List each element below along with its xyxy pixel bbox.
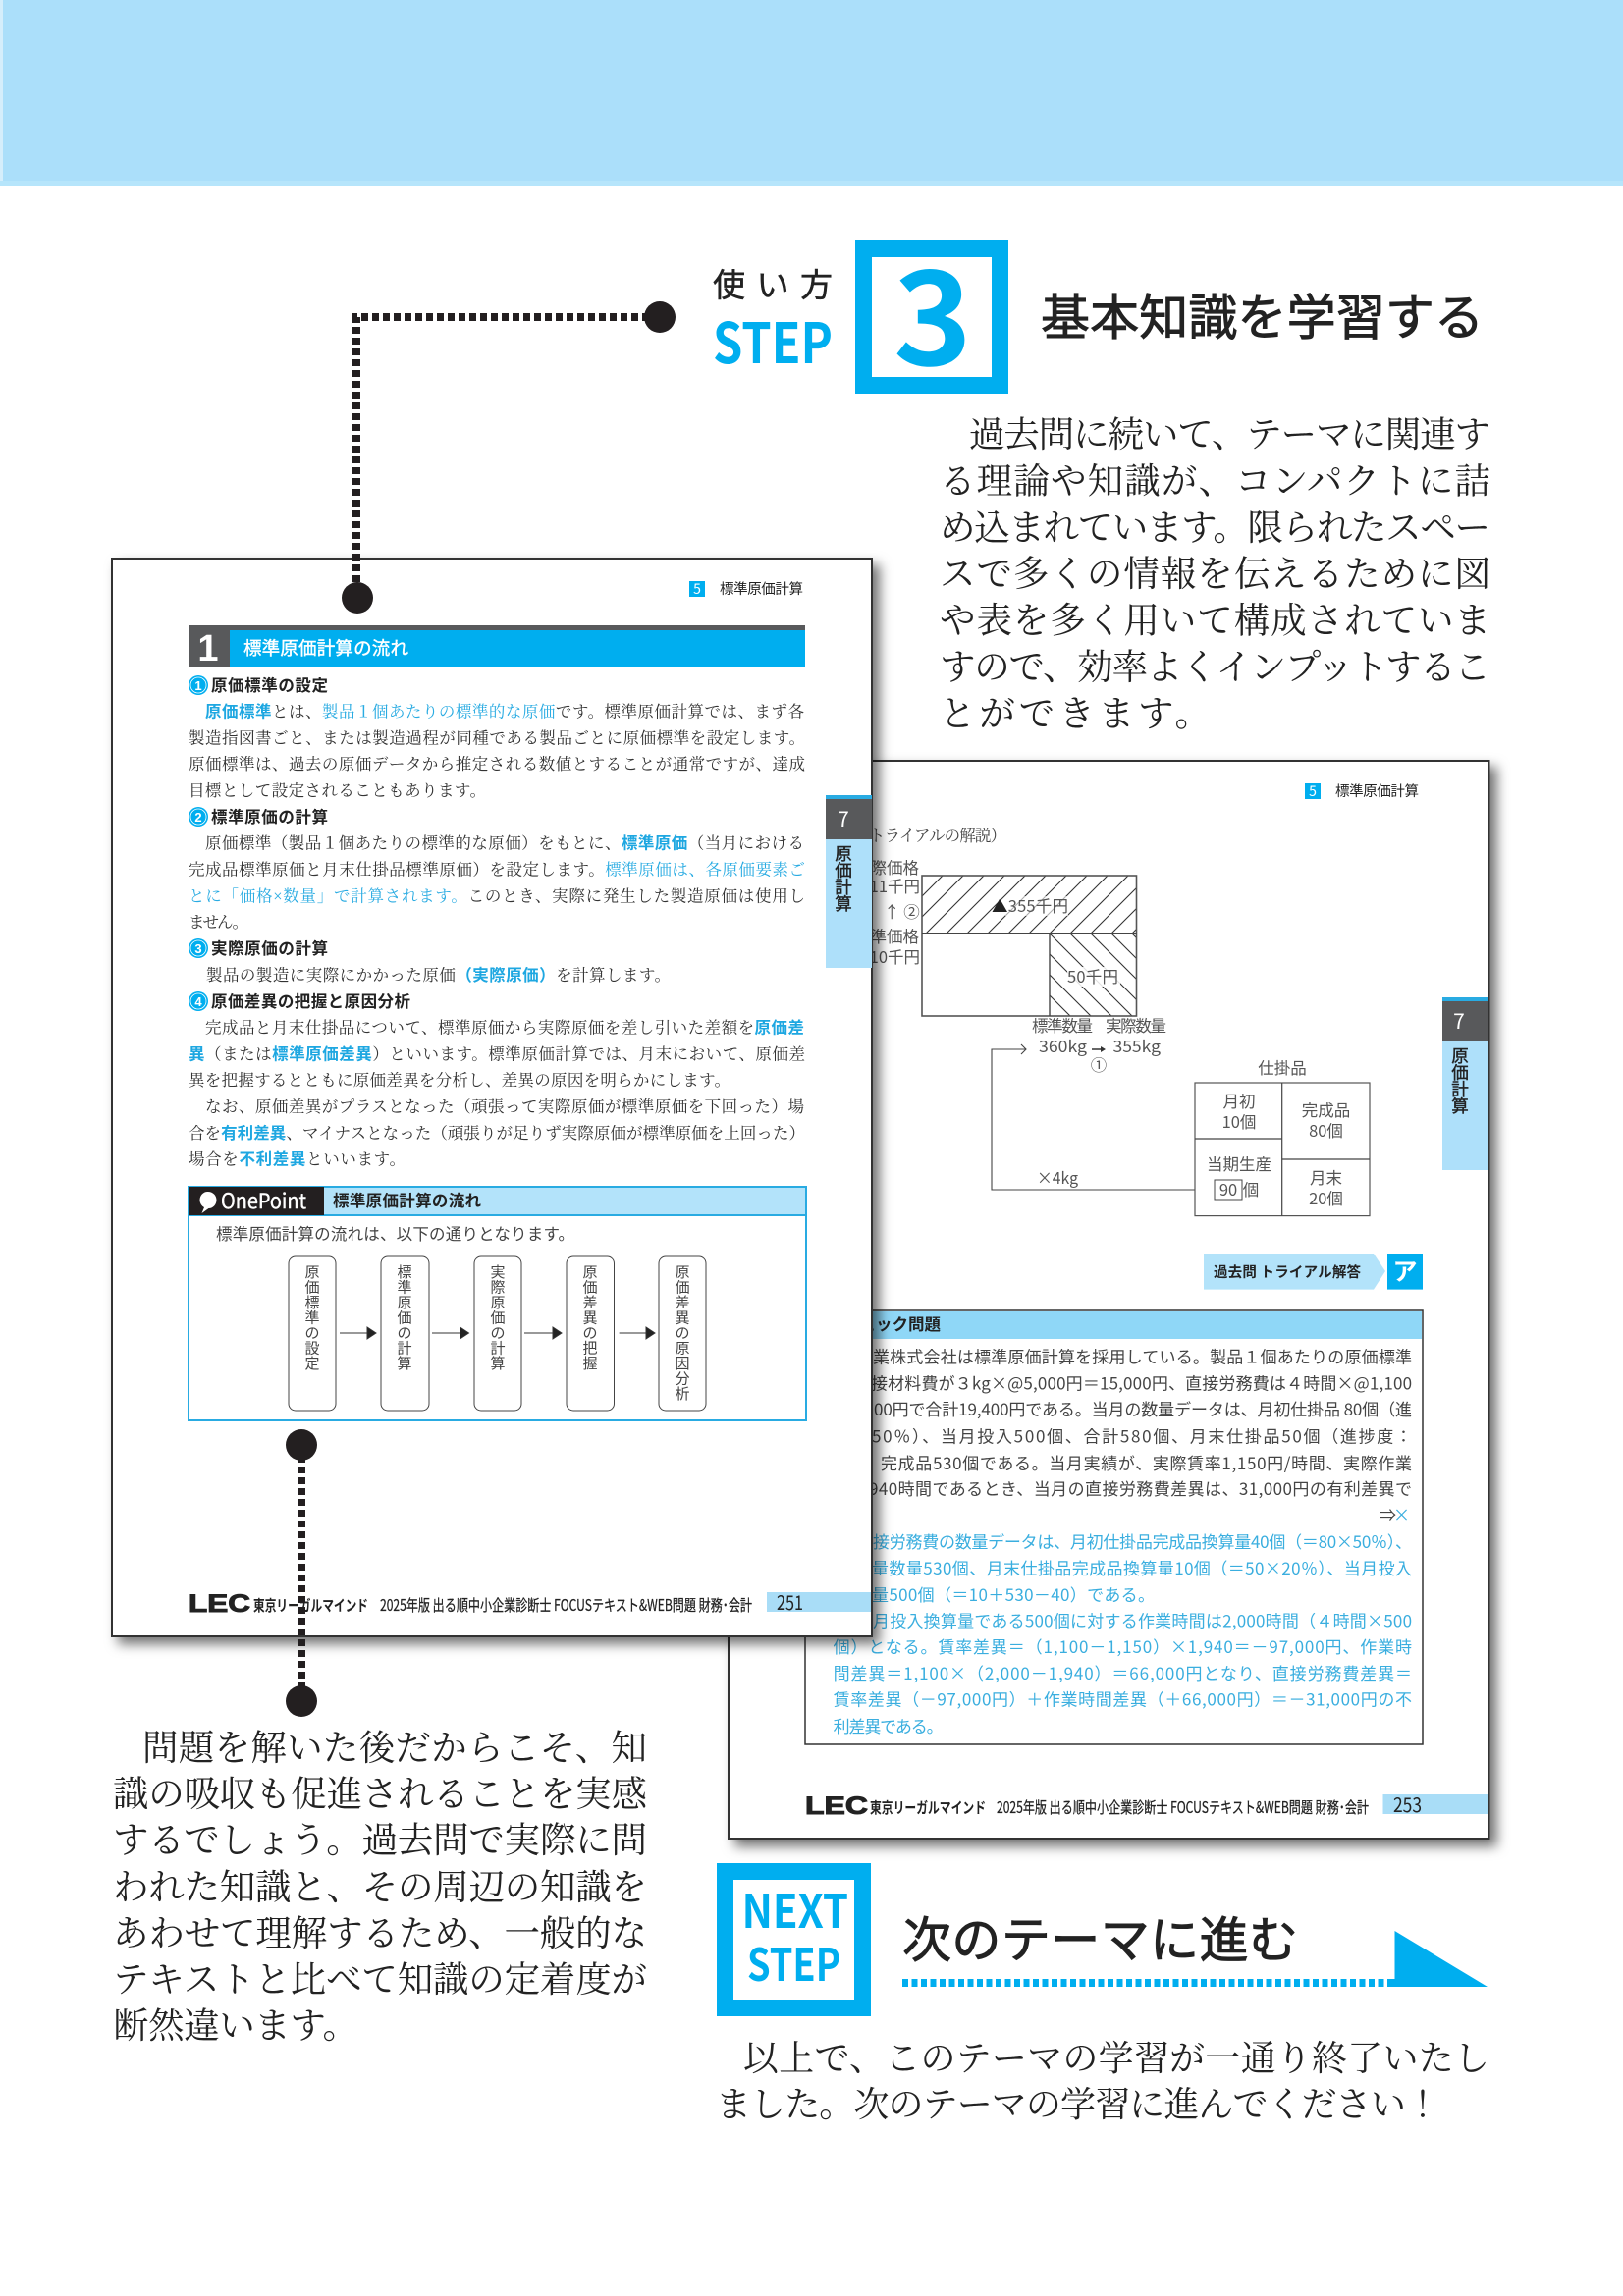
variance chart: ①	[1091, 1052, 1107, 1076]
check question box: 月投入換算量である500個に対する作業時間は2,000時間（４時間×500	[873, 1608, 1412, 1631]
chapter tab: 原価計算	[835, 841, 852, 916]
next step box: STEP	[747, 1930, 840, 1995]
subheading 2: 2	[194, 810, 202, 825]
check question box: 接労務費の数量データは、月初仕掛品完成品換算量40個（＝80×50％）、	[873, 1528, 1412, 1553]
page footer: 2025年版 出る順中小企業診断士 FOCUSテキスト&WEB問題 財務･会計	[997, 1794, 1369, 1818]
work in process table: 月末	[1310, 1165, 1342, 1189]
body text 4: 場合を不利差異といいます。	[189, 1147, 406, 1170]
work in process table: 当期生産	[1207, 1151, 1271, 1175]
variance chart: ▲355千円	[992, 893, 1068, 917]
section label: 5	[693, 579, 701, 599]
flow diagram: 標準原価の計算	[397, 1261, 412, 1373]
work in process table: 10個	[1222, 1109, 1256, 1133]
answer badge: ア	[1392, 1253, 1418, 1288]
work in process table: 仕掛品	[1258, 1055, 1307, 1079]
intro text	[940, 414, 1490, 733]
work in process table: 80個	[1309, 1118, 1343, 1142]
work in process table: 月初	[1223, 1089, 1255, 1112]
page footer: 251	[777, 1587, 803, 1616]
lower left text: 識の吸収も促進されることを実感	[113, 1774, 648, 1814]
chapter tab: 原価計算	[1451, 1043, 1469, 1118]
body text 1: 原価標準は、過去の原価データから推定される数値とすることが通常ですが、達成	[189, 755, 805, 774]
check question box: チェック問題	[843, 1311, 941, 1335]
OnePoint intro: 標準原価計算の流れは、以下の通りとなります。	[216, 1221, 574, 1245]
lower left text: 断然違います。	[113, 2005, 358, 2046]
answer badge	[1204, 1253, 1423, 1290]
body text 2: 原価標準（製品１個あたりの標準的な原価）をもとに、標準原価（当月における	[205, 830, 804, 854]
connector: step heading to page	[342, 301, 676, 614]
page footer: 253	[1393, 1789, 1422, 1818]
flow diagram: 原価差異の原因分析	[675, 1261, 690, 1404]
variance chart: 標準数量	[1032, 1013, 1093, 1037]
subheading 1: 1	[194, 678, 202, 693]
page footer: 東京リーガルマインド	[870, 1796, 986, 1818]
subheading 4: 原価差異の把握と原因分析	[211, 988, 410, 1012]
page footer: 東京リーガルマインド	[253, 1594, 368, 1616]
subheading 2: 標準原価の計算	[211, 804, 328, 828]
explanation heading: トライアルの解説）	[869, 827, 1006, 845]
intro text: スで多くの情報を伝えるために図	[940, 554, 1490, 594]
variance chart: 360kg	[1039, 1034, 1088, 1057]
body text 1: 目標として設定されることもあります。	[189, 781, 486, 800]
lower left text	[113, 1728, 648, 2046]
check question box: ⇒×	[1380, 1502, 1410, 1525]
page footer	[189, 1587, 871, 1618]
top colour band	[0, 0, 1623, 186]
work in process table: 20個	[1309, 1186, 1343, 1209]
variance chart: 実際数量	[1106, 1013, 1166, 1037]
variance chart	[854, 855, 1166, 1076]
arrow: next step	[902, 1931, 1488, 1987]
intro text: すので、効率よくインプットするこ	[940, 647, 1490, 687]
chapter tab	[1442, 997, 1488, 1170]
intro text: る理論や知識が、コンパクトに詰	[940, 460, 1490, 501]
answer badge: 過去問 トライアル解答	[1214, 1261, 1361, 1282]
arrow: quantity link	[992, 1044, 1215, 1190]
body text 4: 異（または標準原価差異）といいます。標準原価計算では、月末において、原価差	[189, 1041, 805, 1064]
section label: 標準原価計算	[720, 578, 803, 599]
OnePoint box	[189, 1186, 806, 1420]
body text 4: なお、原価差異がプラスとなった（頑張って実際原価が標準原価を下回った）場	[205, 1097, 804, 1116]
variance chart: 50千円	[1067, 964, 1118, 988]
section label: 5	[1309, 781, 1317, 801]
variance chart: 標準価格	[854, 924, 919, 947]
flow diagram: 実際原価の計算	[490, 1261, 506, 1373]
section label: 標準原価計算	[1335, 780, 1419, 801]
step heading	[713, 218, 1484, 402]
panel: page 253	[729, 761, 1488, 1839]
subheading 4: 4	[194, 994, 202, 1009]
subheading 3: 実際原価の計算	[211, 935, 328, 959]
check question box: 50％）、当月投入500個、合計580個、月末仕掛品50個（進捗度：	[872, 1423, 1412, 1447]
check question box: 接材料費が３kg×@5,000円＝15,000円、直接労務費は４時間×@1,100	[871, 1370, 1412, 1394]
body text 3: 製品の製造に実際にかかった原価（実際原価）を計算します。	[206, 962, 671, 986]
page footer	[805, 1789, 1488, 1820]
check question box	[805, 1310, 1423, 1744]
body text 4	[189, 1015, 805, 1170]
variance chart: 355kg	[1113, 1034, 1162, 1057]
next step title: 次のテーマに進む	[902, 1901, 1298, 1972]
section title bar: 標準原価計算の流れ	[243, 635, 408, 661]
lower left text: 問題を解いた後だからこそ、知	[142, 1728, 647, 1768]
label: 使い方: 使い方	[713, 259, 833, 306]
variance chart: 11千円	[870, 874, 920, 897]
step number box	[864, 249, 1000, 385]
next step box: NEXT	[742, 1874, 848, 1942]
icon: speech bubble	[200, 1192, 216, 1213]
check question box: 完成品530個である。当月実績が、実際賃率1,150円/時間、実際作業	[881, 1450, 1412, 1474]
page footer: LEC	[189, 1590, 250, 1618]
intro text: め込まれています。限られたスペー	[940, 507, 1490, 548]
variance chart: ↑ ②	[884, 899, 920, 923]
flow diagram: 原価標準の設定	[304, 1261, 320, 1373]
work in process table: 完成品	[1302, 1097, 1350, 1121]
body text 1	[189, 699, 805, 800]
panel: page 251	[112, 559, 872, 1636]
label: ×4kg: ×4kg	[1037, 1165, 1079, 1189]
check question box: 00円で合計19,400円である。当月の数量データは、月初仕掛品 80個（進	[874, 1396, 1412, 1420]
next step text: 以上で、このテーマの学習が一通り終了いたし	[743, 2039, 1489, 2078]
work in process table	[1195, 1055, 1370, 1216]
body text 2: とに「価格×数量」で計算されます。このとき、実際に発生した製造原価は使用し	[189, 885, 805, 905]
intro text: とができます。	[940, 693, 1211, 733]
page footer: LEC	[805, 1792, 868, 1820]
OnePoint label: OnePoint	[221, 1186, 306, 1215]
check question box: 量500個（＝10＋530－40）である。	[872, 1581, 1155, 1606]
check question box: 940時間であるとき、当月の直接労務費差異は、31,000円の有利差異で	[869, 1475, 1412, 1500]
chapter tab	[826, 795, 872, 968]
lower left text: テキストと比べて知識の定着度が	[113, 1959, 647, 2000]
subheading 3: 3	[194, 941, 202, 956]
body text 4: 合を有利差異、マイナスとなった（頑張りが足りず実際原価が標準原価を上回った）	[189, 1120, 805, 1144]
work in process table: 90	[1219, 1177, 1237, 1201]
chapter tab: 7	[838, 804, 849, 833]
number 3: 3	[893, 218, 972, 402]
section title bar: 1	[197, 628, 219, 669]
lower left text: あわせて理解するため、一般的な	[113, 1913, 647, 1953]
next step box	[725, 1871, 862, 2008]
connector: page to lower text	[286, 1429, 317, 1717]
variance chart: 実際価格	[854, 855, 919, 879]
check question box: 個）となる。賃率差異＝（1,100－1,150）×1,940＝－97,000円、作業時	[834, 1633, 1412, 1658]
work in process table: 個	[1243, 1177, 1259, 1201]
flow diagram: 原価差異の把握	[582, 1261, 598, 1373]
section title bar	[189, 625, 805, 669]
body text 2	[189, 830, 805, 932]
step title: 基本知識を学習する	[1041, 279, 1484, 349]
page footer: 2025年版 出る順中小企業診断士 FOCUSテキスト&WEB問題 財務･会計	[380, 1592, 752, 1616]
chapter tab: 7	[1453, 1006, 1465, 1036]
body text 2: 完成品標準原価と月末仕掛品標準原価）を設定します。標準原価は、各原価要素ご	[189, 860, 805, 880]
check question box: 賃率差異（－97,000円）＋作業時間差異（＋66,000円）＝－31,000円の不	[834, 1686, 1412, 1710]
check question box: 間差異＝1,100×（2,000－1,940）＝66,000円となり、直接労務費差異＝	[834, 1660, 1412, 1684]
intro text: 過去問に続いて、テーマに関連す	[969, 414, 1490, 454]
body text 2: ません。	[189, 913, 248, 932]
next step text	[716, 2039, 1489, 2124]
check question box: 業株式会社は標準原価計算を採用している。製品１個あたりの原価標準	[873, 1343, 1412, 1368]
label: STEP: STEP	[713, 299, 833, 380]
body text 1: 原価標準とは、製品１個あたりの標準的な原価です。標準原価計算では、まず各	[205, 699, 805, 722]
flow diagram	[289, 1256, 706, 1411]
body text 4: 完成品と月末仕掛品について、標準原価から実際原価を差し引いた差額を原価差	[205, 1015, 804, 1039]
OnePoint title: 標準原価計算の流れ	[333, 1188, 481, 1211]
lower left text: するでしょう。過去問で実際に問	[113, 1820, 647, 1860]
lower left text: われた知識と、その周辺の知識を	[113, 1867, 647, 1907]
subheading 1: 原価標準の設定	[211, 672, 328, 696]
check question box: 利差異である。	[834, 1713, 944, 1737]
variance chart: 10千円	[870, 944, 920, 968]
body text 1: 製造指図書ごと、または製造過程が同種である製品ごとに原価標準を設定します。	[189, 727, 805, 747]
intro text: や表を多く用いて構成されていま	[940, 601, 1490, 641]
next step text: ました。次のテーマの学習に進んでください！	[716, 2085, 1440, 2124]
body text 4: 異を把握するとともに原価差異を分析し、差異の原因を明らかにします。	[189, 1071, 730, 1090]
check question box: 量数量530個、月末仕掛品完成品換算量10個（＝50×20％）、当月投入	[872, 1555, 1412, 1579]
